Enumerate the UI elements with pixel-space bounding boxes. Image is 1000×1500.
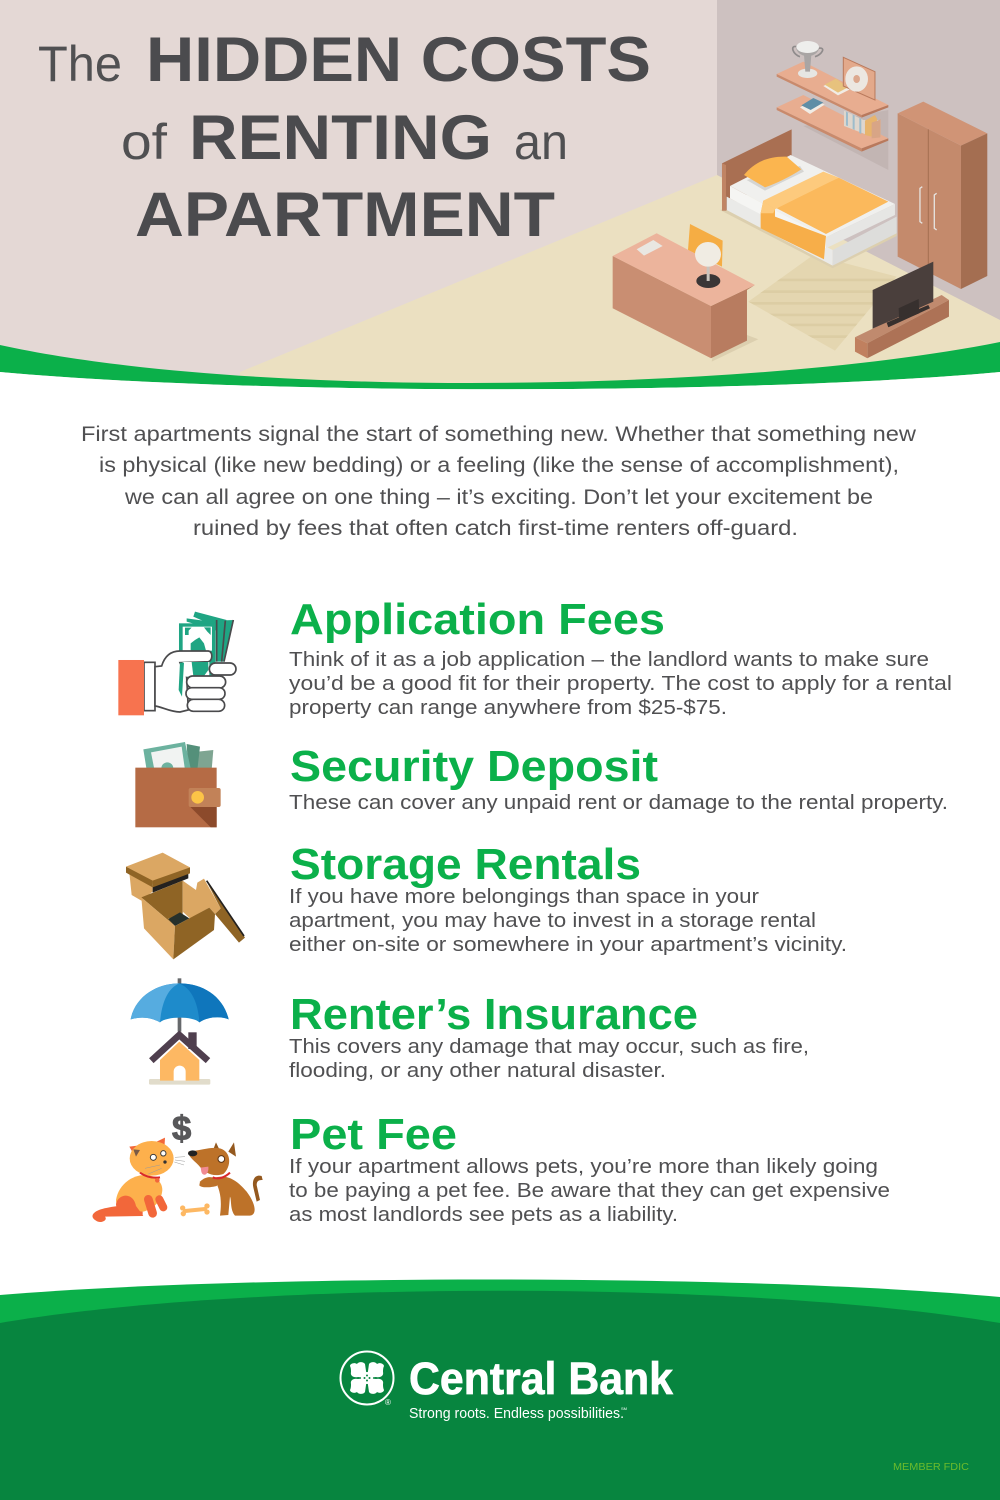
text: renter's insurance description: flooding, or any other natural disaster. <box>289 1059 666 1082</box>
icon: hand holding cash <box>118 612 236 715</box>
intro paragraph: we can all agree on one thing – it’s exciting. Don’t let your excitement be <box>124 486 873 509</box>
text: pet fee description: If your apartment allows pets, you’re more than likely going <box>289 1155 878 1178</box>
tv and stand <box>855 262 949 358</box>
desk <box>613 224 758 362</box>
text: pet fee description <box>289 1155 890 1226</box>
logo clover mark: ® <box>385 1398 391 1407</box>
bone <box>180 1203 210 1216</box>
logo clover mark <box>340 1352 394 1407</box>
text: renter's insurance description: This covers any damage that may occur, such as fire, <box>289 1035 809 1058</box>
dollar sign: $ <box>172 1110 191 1148</box>
title: an <box>514 114 568 170</box>
icon: cardboard boxes <box>126 853 245 959</box>
header panel: room background <box>0 0 1000 385</box>
text: security deposit description: These can cover any unpaid rent or damage to the rental property. <box>289 791 948 814</box>
text: storage rentals description <box>289 885 847 956</box>
intro paragraph: First apartments signal the start of something new. Whether that something new <box>81 423 917 446</box>
title: HIDDEN COSTS <box>146 25 651 95</box>
logo: Central Bank: Strong roots. Endless possibilities. <box>409 1405 624 1422</box>
text: application fees description: property can range anywhere from $25-$75. <box>289 696 727 719</box>
heading: Renter's Insurance: Renter’s Insurance <box>290 990 698 1039</box>
icon: cat and dog with dollar sign <box>92 1110 263 1222</box>
text: storage rentals description: either on-site or somewhere in your apartment’s vicinity. <box>289 933 847 956</box>
member fdic note: MEMBER FDIC <box>893 1462 969 1473</box>
intro paragraph: is physical (like new bedding) or a feeling (like the sense of accomplishment), <box>99 454 899 477</box>
heading: Security Deposit: Security Deposit <box>290 742 658 791</box>
title: The <box>38 36 122 92</box>
heading: Storage Rentals: Storage Rentals <box>290 840 641 889</box>
header green curve <box>0 342 1000 395</box>
icon: umbrella over house <box>131 978 229 1085</box>
logo: Central Bank <box>340 1352 674 1422</box>
text: application fees description <box>289 648 952 719</box>
text: application fees description: Think of it as a job application – the landlord wants to make sure <box>289 648 929 671</box>
rug <box>747 255 900 351</box>
wardrobe <box>898 102 987 289</box>
title: RENTING <box>189 103 492 173</box>
text: application fees description: you’d be a good fit for their property. The cost to apply for a rental <box>289 672 952 695</box>
logo: Central Bank: SM <box>621 1406 627 1411</box>
intro paragraph: ruined by fees that often catch first-time renters off-guard. <box>193 517 798 540</box>
title: of <box>121 114 167 170</box>
footer panel <box>0 1279 1000 1500</box>
icon: wallet with cash <box>135 742 221 827</box>
logo: Central Bank: Central Bank <box>409 1353 674 1404</box>
wall shelves <box>777 57 888 170</box>
intro paragraph <box>81 423 917 540</box>
title <box>38 25 651 250</box>
heading: Pet Fee: Pet Fee <box>290 1110 457 1159</box>
trophy <box>793 41 823 78</box>
text: pet fee description: as most landlords see pets as a liability. <box>289 1203 678 1226</box>
cat <box>92 1138 185 1222</box>
text: pet fee description: to be paying a pet fee. Be aware that they can get expensive <box>289 1179 890 1202</box>
illustration: isometric bedroom <box>613 41 987 362</box>
bed <box>720 129 897 268</box>
text: storage rentals description: If you have more belongings than space in your <box>289 885 759 908</box>
title: APARTMENT <box>135 180 555 250</box>
heading: Application Fees: Application Fees <box>290 595 665 644</box>
text: storage rentals description: apartment, you may have to invest in a storage rental <box>289 909 816 932</box>
text: renter's insurance description <box>289 1035 809 1082</box>
dog <box>188 1142 263 1216</box>
